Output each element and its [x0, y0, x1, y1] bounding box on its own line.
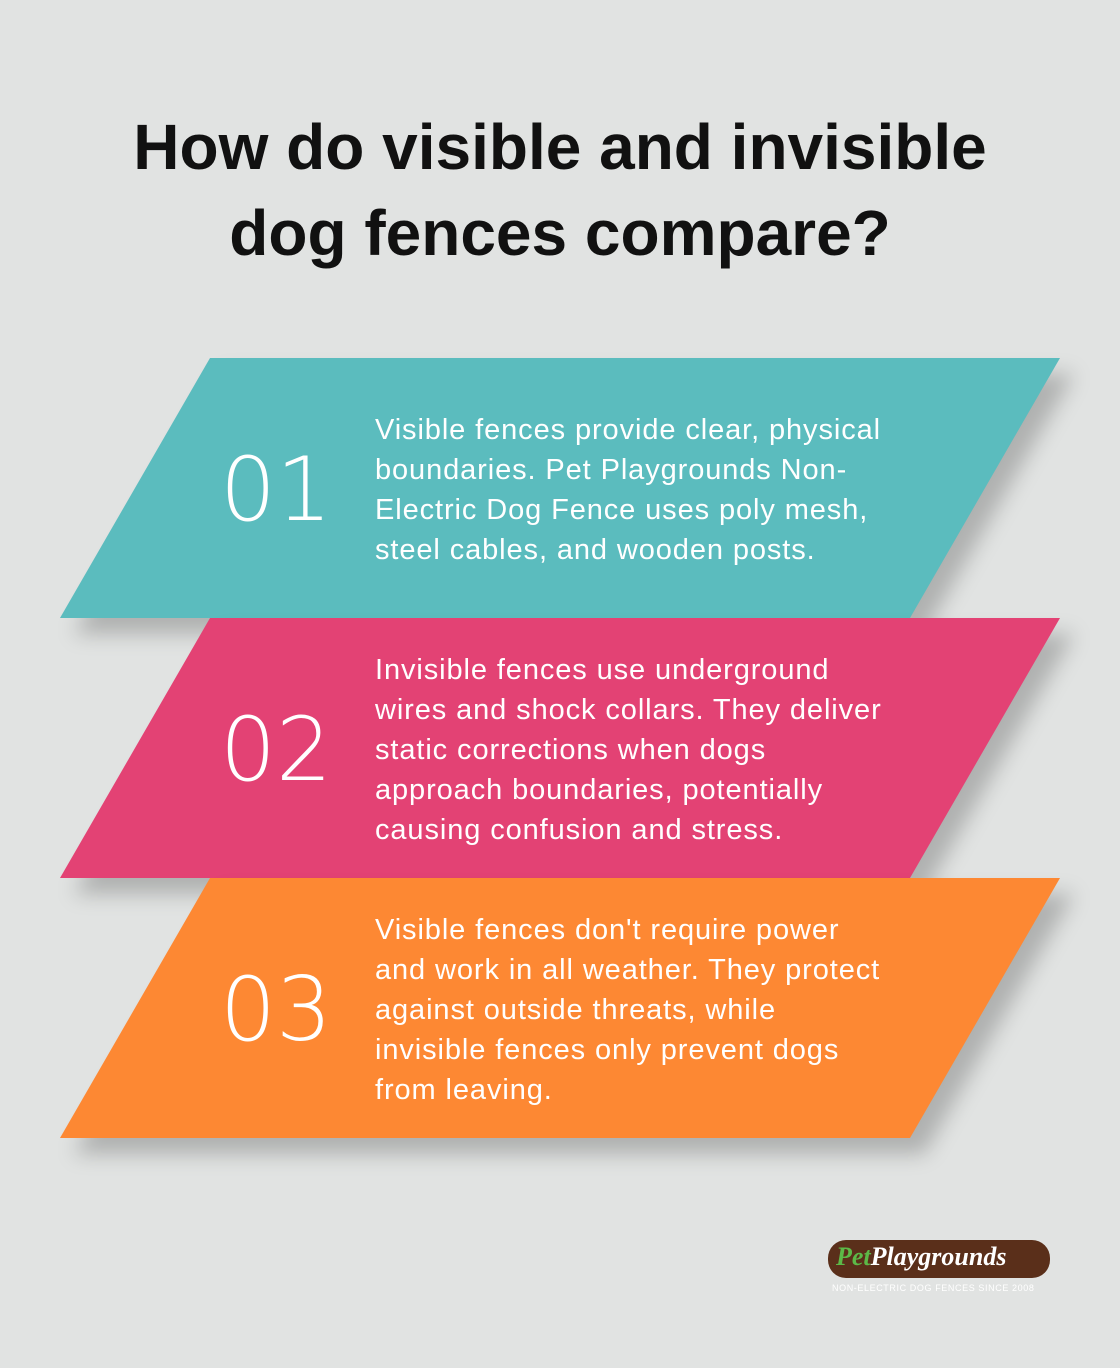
text 02: static corrections when dogs [375, 734, 766, 766]
logo: NON-ELECTRIC DOG FENCES SINCE 2008 [832, 1283, 1034, 1293]
title: How do visible and invisible [133, 111, 987, 183]
text 03: against outside threats, while [375, 994, 776, 1026]
text 02: Invisible fences use underground [375, 654, 829, 686]
text 02 [375, 654, 882, 846]
number 01: 01 [220, 438, 332, 541]
panel: 03 [60, 878, 1076, 1164]
text 03 [375, 914, 880, 1106]
text 02: approach boundaries, potentially [375, 774, 823, 806]
title [133, 111, 987, 269]
text 02: wires and shock collars. They deliver [375, 694, 882, 726]
text 01: Visible fences provide clear, physical [375, 414, 881, 446]
text 03: and work in all weather. They protect [375, 954, 880, 986]
number 03: 03 [220, 958, 332, 1061]
number 02: 02 [220, 698, 332, 801]
text 01: boundaries. Pet Playgrounds Non- [375, 454, 847, 486]
text 01: Electric Dog Fence uses poly mesh, [375, 494, 868, 526]
text 03: invisible fences only prevent dogs [375, 1034, 839, 1066]
text 01: steel cables, and wooden posts. [375, 534, 816, 566]
panel: 02 [60, 618, 1076, 904]
title: dog fences compare? [229, 197, 891, 269]
text 03: from leaving. [375, 1074, 553, 1106]
text 01 [375, 414, 881, 566]
logo [828, 1240, 1050, 1293]
text 02: causing confusion and stress. [375, 814, 783, 846]
panel: 01 [60, 358, 1076, 644]
logo: PetPlaygrounds [836, 1242, 1006, 1271]
text 03: Visible fences don't require power [375, 914, 839, 946]
